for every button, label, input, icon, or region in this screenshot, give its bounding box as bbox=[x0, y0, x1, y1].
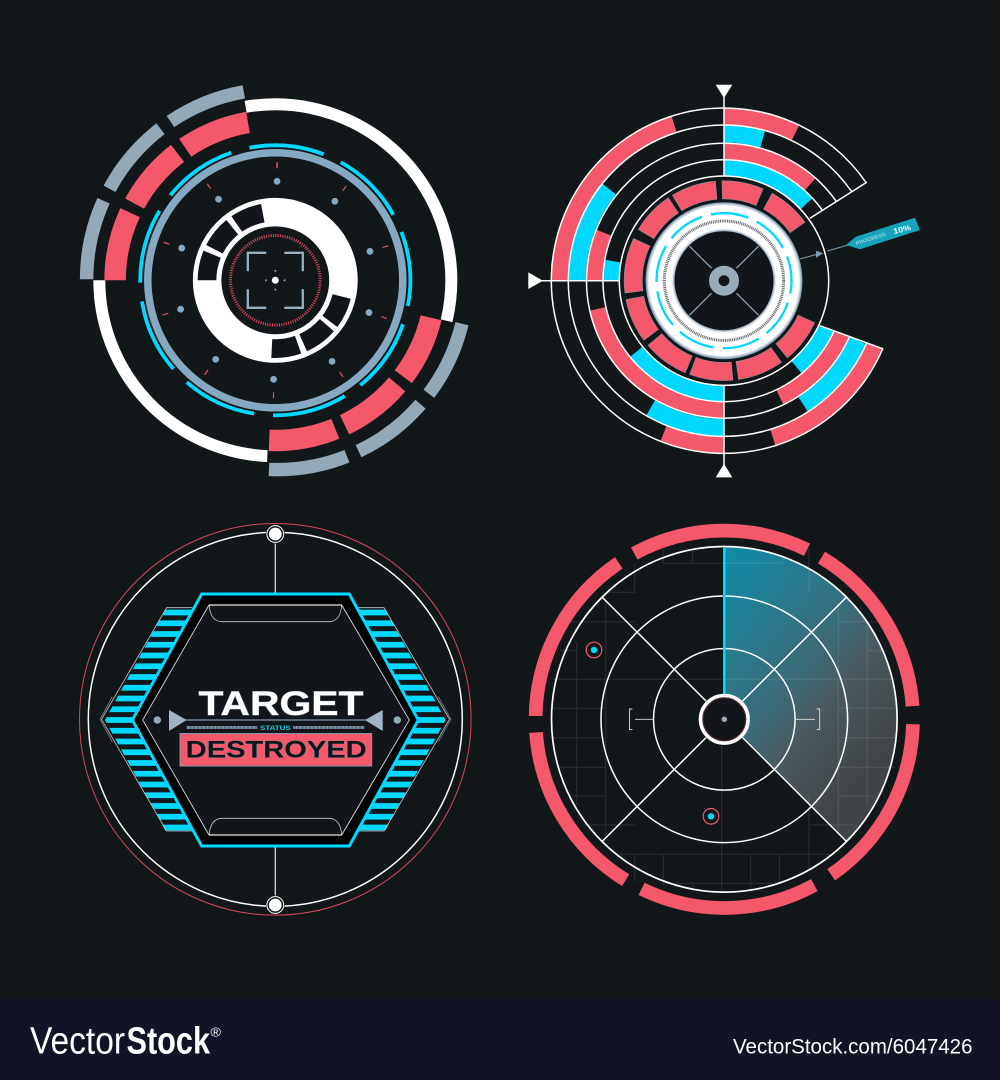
divider line and triangles bbox=[154, 710, 401, 731]
cyan sweep edge bbox=[723, 548, 726, 696]
top and bottom tabs bbox=[209, 605, 342, 835]
panel: radial progress chart bbox=[497, 54, 951, 507]
progress tag bbox=[846, 218, 920, 249]
connector lines bbox=[274, 540, 276, 898]
red fine tick ring bbox=[230, 235, 320, 325]
outer white ring arcs bbox=[72, 77, 478, 483]
right stripes bbox=[360, 610, 446, 830]
footer image id: VectorStock.com/6047426 bbox=[733, 1035, 972, 1058]
hub spokes bbox=[690, 246, 758, 315]
red tick marks bbox=[159, 164, 392, 397]
hatched status bars bbox=[187, 726, 364, 729]
top node bbox=[266, 524, 285, 544]
progress tag: PROGRESS bbox=[855, 232, 887, 247]
progress tag: 10% bbox=[892, 223, 912, 236]
bottom node bbox=[266, 896, 285, 914]
faint grid bbox=[553, 548, 895, 892]
arrow to progress tag bbox=[800, 245, 848, 259]
central white ring with dark cells bbox=[179, 184, 372, 377]
thin white ring arcs bbox=[497, 54, 951, 507]
cyan hub dashes bbox=[629, 185, 819, 376]
left stripes bbox=[105, 610, 192, 830]
radar diagonals bbox=[602, 597, 846, 842]
centre dot and pointers bbox=[265, 270, 285, 290]
panel: radar bbox=[465, 460, 984, 979]
footer logo: Stock bbox=[126, 1020, 211, 1062]
grey dots bbox=[176, 178, 374, 383]
range bracket right bbox=[796, 709, 820, 730]
coloured band segments bbox=[508, 65, 940, 497]
crosshair axes bbox=[529, 86, 724, 476]
hub axle bbox=[714, 270, 734, 291]
cyan hexagon bbox=[132, 594, 418, 846]
footer logo: Vector bbox=[30, 1020, 125, 1062]
title: TARGET: TARGET bbox=[198, 685, 364, 723]
outer red circle bbox=[79, 524, 471, 915]
red arc segments bbox=[49, 54, 501, 506]
radar centre bbox=[700, 696, 748, 743]
panel: target destroyed badge bbox=[79, 524, 471, 915]
viewfinder brackets bbox=[248, 253, 303, 308]
dark hub centre bbox=[674, 231, 774, 330]
stripe outlines bbox=[100, 608, 451, 831]
triangle markers bbox=[528, 85, 732, 477]
white hub ring bbox=[646, 202, 802, 359]
radar rings bbox=[552, 546, 897, 892]
destroyed banner: DESTROYED bbox=[186, 737, 367, 764]
inner red segments bbox=[597, 154, 851, 408]
white circle bbox=[88, 532, 462, 906]
destroyed banner bbox=[180, 734, 372, 766]
footer band bbox=[0, 999, 1000, 1080]
status label: STATUS bbox=[260, 726, 291, 732]
grey outer arc segments bbox=[8, 11, 545, 548]
radar sweep sector bbox=[724, 546, 897, 842]
red outer arcs bbox=[465, 460, 984, 979]
range bracket left bbox=[630, 709, 653, 730]
dotted grey ring bbox=[664, 221, 784, 340]
blue-grey ring bbox=[148, 153, 403, 408]
inner white hexagon bbox=[143, 605, 409, 835]
panel: segmented targeting dial bbox=[8, 11, 545, 548]
footer logo: ® bbox=[210, 1024, 221, 1040]
blip: upper left bbox=[586, 642, 602, 658]
blip: bottom bbox=[703, 808, 719, 824]
footer logo bbox=[30, 1020, 221, 1062]
cyan dashed arcs bbox=[85, 90, 466, 471]
